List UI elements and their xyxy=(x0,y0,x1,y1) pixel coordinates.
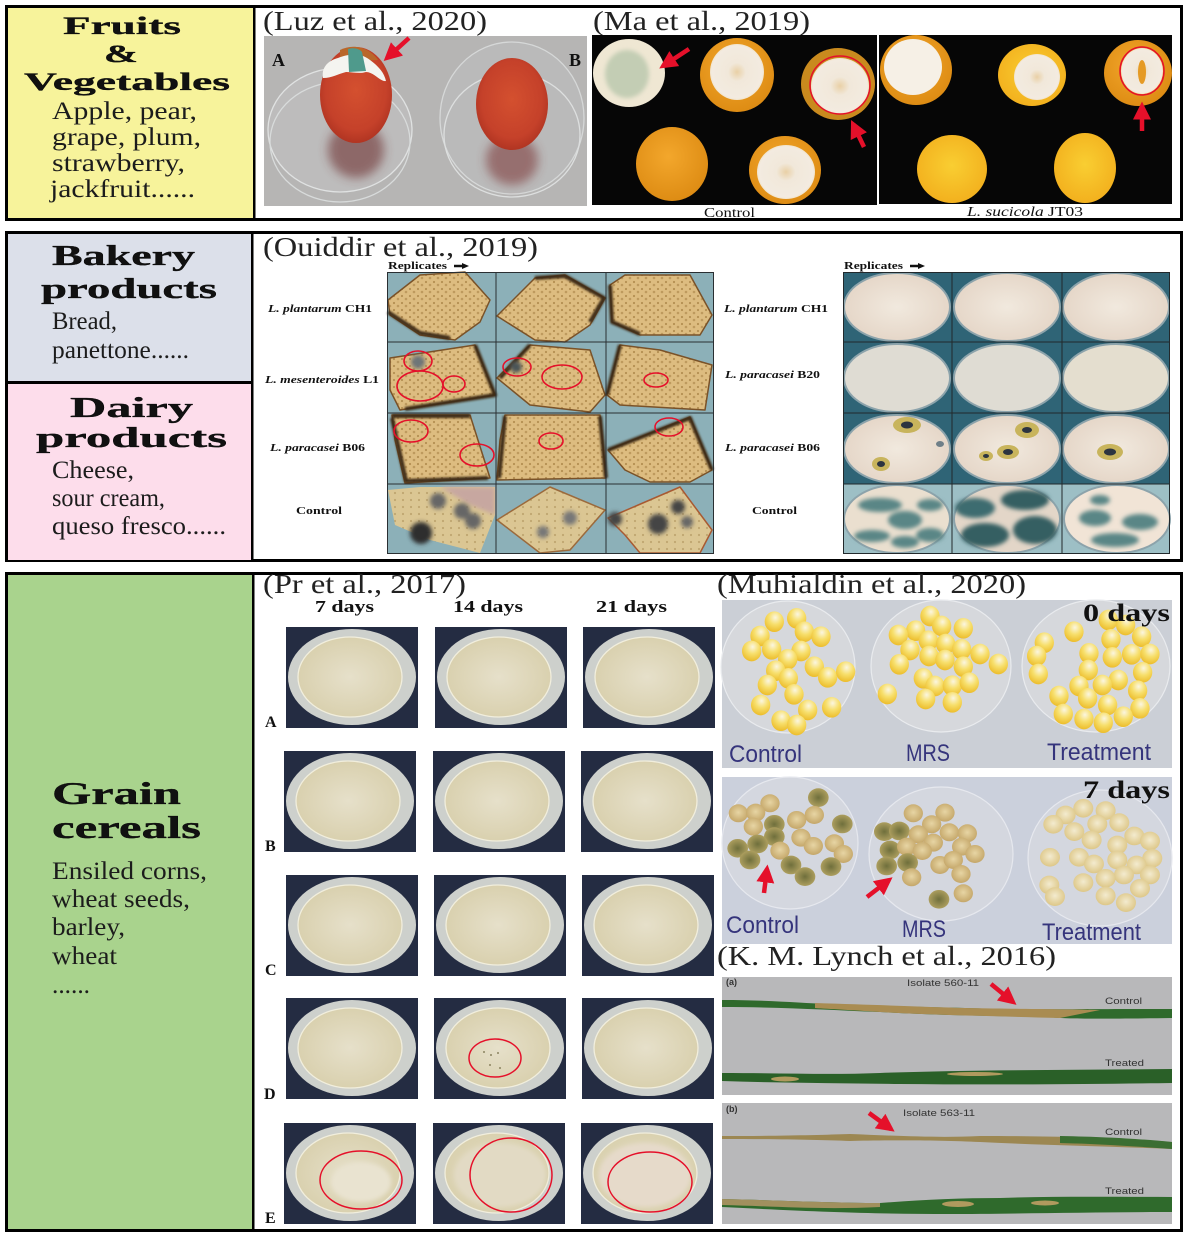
food examples: bakery: Bread, xyxy=(52,308,117,335)
food examples: grains: barley, xyxy=(52,914,125,941)
food examples: grains: wheat xyxy=(52,943,117,970)
row labels: bread grid: Control xyxy=(296,505,342,517)
heading: dairy products: products xyxy=(36,423,227,454)
column headings: days: 21 days xyxy=(596,597,667,616)
food examples: fruits: jackfruit...... xyxy=(49,176,195,203)
leaf labels: isolate 563-11: Control xyxy=(1105,1127,1142,1137)
heading: fruits and vegetables: Fruits xyxy=(63,13,181,40)
photo labels A B: A xyxy=(272,50,285,70)
red arrows: diseased leaves xyxy=(869,984,1013,1129)
heading: grain cereals: cereals xyxy=(52,809,201,845)
citation: Luz 2020: (Luz et al., 2020) xyxy=(263,6,487,36)
handwritten labels: 7 days: Treatment xyxy=(1042,919,1141,946)
heading: fruits and vegetables: & xyxy=(104,41,138,68)
row labels: plate grid xyxy=(723,303,828,517)
heading: fruits and vegetables xyxy=(24,13,230,96)
red circles: mould spots on bread xyxy=(394,351,683,466)
food examples: dairy: queso fresco...... xyxy=(52,513,226,540)
panel: bakery and dairy products xyxy=(6,232,1182,560)
food examples: fruits: grape, plum, xyxy=(52,124,201,151)
food examples: fruits: Apple, pear, xyxy=(52,98,197,125)
photo: oranges control xyxy=(592,35,877,205)
plate row D xyxy=(264,998,714,1103)
tomato A with mould xyxy=(320,47,392,143)
photo labels A B: B xyxy=(569,50,581,70)
leaf labels: isolate 560-11: (a) xyxy=(726,977,737,987)
replicates label: plate grid: Replicates xyxy=(844,260,904,272)
leaf labels: isolate 563-11: (b) xyxy=(726,1104,738,1114)
leaf labels: isolate 560-11: Control xyxy=(1105,996,1142,1006)
citation: Ma 2019: (Ma et al., 2019) xyxy=(593,6,810,36)
category box: bakery products xyxy=(8,234,251,381)
category box: fruits and vegetables xyxy=(8,6,256,219)
category box: dairy products xyxy=(8,384,251,560)
category box: grain cereals xyxy=(8,574,254,1230)
plate row B xyxy=(265,751,713,855)
handwritten labels: 0 days: Treatment xyxy=(1047,739,1151,766)
photo: corn at 7 days xyxy=(722,777,1172,946)
food examples: dairy: sour cream, xyxy=(52,485,165,512)
food examples: grains: wheat seeds, xyxy=(52,886,190,913)
food examples: dairy: Cheese, xyxy=(52,457,134,484)
caption: L. sucicola JT03: L. sucicola JT03 xyxy=(966,205,1083,220)
row labels: bread grid: L. plantarum CH1 xyxy=(267,303,372,315)
replicates label: bread grid xyxy=(388,260,469,272)
leaf labels: isolate 563-11: Isolate 563-11 xyxy=(903,1108,975,1118)
time label: 0 days: 0 days xyxy=(1083,600,1170,627)
food examples: dairy xyxy=(52,457,226,540)
bread crusts xyxy=(388,276,712,481)
heading: grain cereals: Grain xyxy=(52,775,181,811)
heading: bakery products: Bakery xyxy=(52,241,195,272)
plate row A xyxy=(265,627,715,731)
column headings: days xyxy=(315,597,667,616)
plate row D: D xyxy=(264,1086,276,1103)
leaf labels: isolate 563-11: Treated xyxy=(1105,1186,1144,1196)
photo grid: yogurt plates with mould xyxy=(843,272,1170,554)
row labels: plate grid: Control xyxy=(752,505,797,517)
leaf labels: isolate 560-11: Treated xyxy=(1105,1058,1144,1068)
photo: leaves isolate 560-11 xyxy=(722,977,1172,1095)
row labels: bread grid: L. mesenteroides L1 xyxy=(264,374,379,386)
handwritten labels: 7 days: Control xyxy=(726,912,799,939)
heading: dairy products xyxy=(36,393,227,454)
heading: grain cereals xyxy=(52,775,201,845)
plate row A: A xyxy=(265,714,277,731)
citation: Ouiddir 2019: (Ouiddir et al., 2019) xyxy=(263,232,538,262)
citation: Muhialdin 2020: (Muhialdin et al., 2020) xyxy=(717,569,1026,599)
photo: leaves isolate 563-11 xyxy=(722,1103,1172,1224)
food examples: bakery: panettone...... xyxy=(52,337,189,364)
handwritten labels: 0 days xyxy=(729,739,1151,768)
photo: corn at 0 days xyxy=(721,600,1172,768)
red circles: mould on plates xyxy=(320,1039,692,1212)
leaf labels: isolate 563-11 xyxy=(726,1104,1144,1196)
replicates label: bread grid: Replicates xyxy=(388,260,448,272)
highlight circles on oranges xyxy=(810,47,1164,114)
handwritten labels: 7 days xyxy=(726,912,1141,946)
heading: bakery products xyxy=(41,241,217,305)
column headings: days: 14 days xyxy=(453,597,523,616)
photo labels A B xyxy=(272,50,581,70)
red arrows: fruit spoilage xyxy=(387,38,1142,147)
time label: 7 days: 7 days xyxy=(1083,777,1170,804)
food examples: fruits xyxy=(49,98,201,203)
plate row C xyxy=(265,875,714,979)
tomato B healthy xyxy=(476,58,548,150)
row labels: bread grid xyxy=(264,303,379,517)
panel: fruits and vegetables xyxy=(6,6,1182,221)
food examples: grains: ...... xyxy=(52,972,90,999)
row labels: bread grid: L. paracasei B06 xyxy=(269,442,366,454)
replicates label: plate grid xyxy=(844,260,925,272)
red arrows: mouldy corn xyxy=(764,869,889,897)
citation: Lynch 2016: (K. M. Lynch et al., 2016) xyxy=(717,941,1056,971)
heading: dairy products: Dairy xyxy=(70,393,193,424)
leaf labels: isolate 560-11: Isolate 560-11 xyxy=(907,978,979,988)
photo: oranges treated xyxy=(879,35,1172,204)
photo grid: bread with mould xyxy=(387,272,714,554)
food examples: grains xyxy=(52,858,207,999)
handwritten labels: 0 days: Control xyxy=(729,741,802,768)
photo: tomatoes in petri dishes xyxy=(264,36,587,206)
plate row B: B xyxy=(265,838,276,855)
panel: grain cereals xyxy=(6,569,1182,1230)
plate row C: C xyxy=(265,962,277,979)
caption: control: Control xyxy=(704,206,755,221)
row labels: plate grid: L. paracasei B20 xyxy=(724,369,821,381)
food examples: bakery xyxy=(52,308,189,364)
handwritten labels: 0 days: MRS xyxy=(906,740,950,767)
row labels: plate grid: L. paracasei B06 xyxy=(724,442,821,454)
handwritten labels: 7 days: MRS xyxy=(902,916,946,943)
column headings: days: 7 days xyxy=(315,597,374,616)
plate row E xyxy=(265,1123,713,1227)
row labels: plate grid: L. plantarum CH1 xyxy=(723,303,828,315)
heading: bakery products: products xyxy=(41,274,217,305)
heading: fruits and vegetables: Vegetables xyxy=(24,69,230,96)
food examples: fruits: strawberry, xyxy=(52,150,185,177)
food examples: grains: Ensiled corns, xyxy=(52,858,207,885)
leaf labels: isolate 560-11 xyxy=(726,977,1144,1068)
plate row E: E xyxy=(265,1210,276,1227)
citation: Pr 2017: (Pr et al., 2017) xyxy=(263,569,466,599)
